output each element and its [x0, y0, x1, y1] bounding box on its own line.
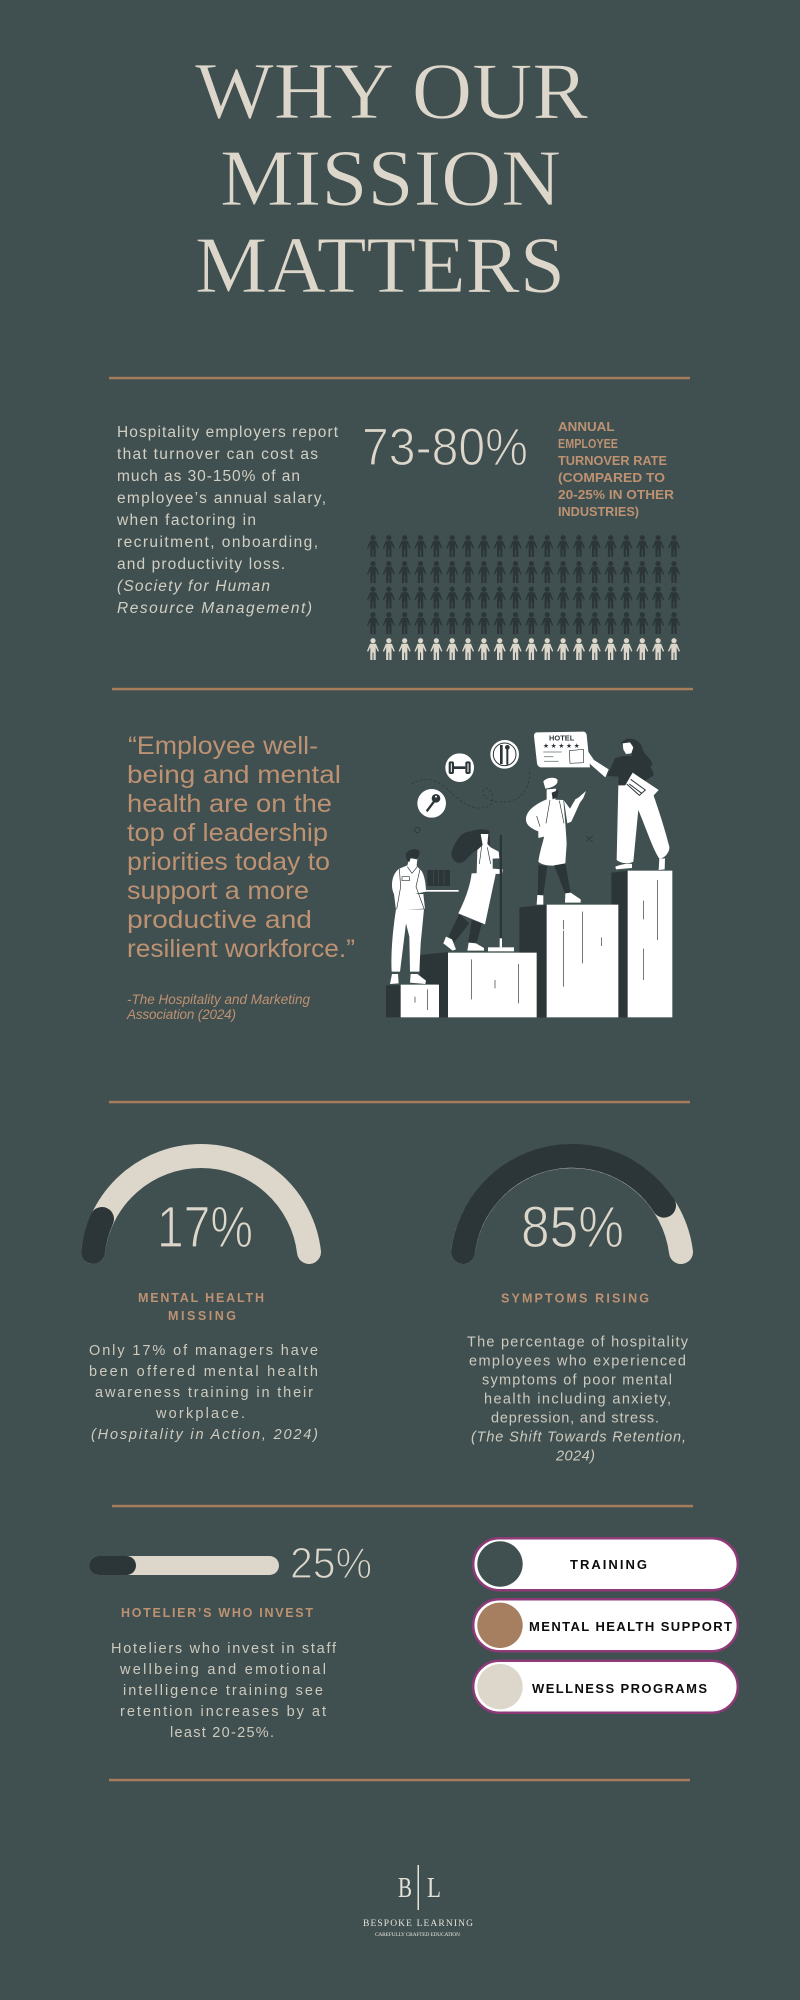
text block: turnover cost: recruitment, onboarding,	[117, 534, 318, 551]
body text: awareness training in their	[95, 1385, 313, 1401]
card: hotel rating: ★★★★★	[543, 742, 580, 750]
logo: Bespoke Learning	[363, 1865, 473, 1938]
body text: been offered mental health	[89, 1364, 318, 1380]
decorations	[415, 827, 593, 842]
legend: wellness programs	[473, 1661, 738, 1713]
heading: MENTAL HEALTH	[138, 1291, 264, 1305]
panel: symptoms rising	[463, 1156, 689, 1464]
label: annual employee turnover rate: INDUSTRIES)	[558, 505, 639, 519]
quote text: productive and	[127, 906, 312, 934]
logo: Bespoke Learning: CAREFULLY CRAFTED EDUCATION	[375, 1932, 460, 1938]
stat: 85%: 85%	[521, 1195, 624, 1260]
body text: symptoms of poor mental	[482, 1372, 672, 1388]
dashed route	[412, 769, 530, 808]
label: annual employee turnover rate	[558, 420, 674, 519]
panel: turnover	[116, 418, 680, 660]
title	[195, 46, 588, 310]
panel: quote	[126, 732, 355, 1022]
logo: Bespoke Learning: B	[398, 1872, 412, 1904]
quote citation	[126, 992, 310, 1022]
body text: employees who experienced	[469, 1354, 686, 1370]
body text: (Hospitality in Action, 2024)	[91, 1427, 318, 1443]
body text: intelligence training see	[123, 1683, 323, 1699]
stat: 25%: 25%	[290, 1539, 372, 1588]
label: annual employee turnover rate: ANNUAL	[558, 420, 615, 434]
text block: turnover cost: employee’s annual salary,	[117, 490, 326, 507]
body text: The percentage of hospitality	[467, 1334, 689, 1350]
progress bar: 25%	[89, 1556, 279, 1575]
figure: chef	[526, 778, 586, 905]
title: MISSION	[220, 133, 561, 223]
text block: turnover cost: when factoring in	[116, 512, 256, 529]
icon: key	[417, 789, 446, 818]
podium shadows	[386, 871, 628, 1017]
legend: training	[473, 1538, 738, 1590]
title: MATTERS	[195, 220, 565, 310]
legend: mental health support: MENTAL HEALTH SUPPORT	[529, 1619, 732, 1634]
text block: turnover cost: much as 30-150% of an	[117, 468, 300, 485]
quote text: resilient workforce.”	[127, 935, 355, 963]
body text: 2024)	[555, 1448, 595, 1464]
gauge: 85%	[463, 1156, 681, 1252]
icon: dumbbell	[445, 753, 474, 782]
body text	[111, 1641, 337, 1741]
quote text	[127, 732, 355, 963]
heading	[138, 1291, 264, 1323]
body text: (The Shift Towards Retention,	[471, 1430, 686, 1446]
body text	[89, 1343, 318, 1443]
text block: turnover cost: (Society for Human	[117, 578, 270, 595]
podiums	[401, 871, 672, 1017]
pictogram: people grid	[367, 535, 680, 660]
panel: mental health missing	[89, 1156, 318, 1443]
body text: retention increases by at	[120, 1704, 326, 1720]
panel: hoteliers who invest	[89, 1539, 372, 1741]
icon: cutlery	[490, 740, 519, 769]
body text: least 20-25%.	[170, 1725, 274, 1741]
legend: wellness programs: WELLNESS PROGRAMS	[532, 1681, 707, 1696]
quote citation: Association (2024)	[126, 1007, 236, 1022]
heading: SYMPTOMS RISING	[501, 1292, 649, 1306]
label: annual employee turnover rate: (COMPARED TO	[558, 471, 665, 485]
heading: MISSING	[168, 1309, 236, 1323]
text block: turnover cost: Resource Management)	[117, 600, 312, 617]
label: annual employee turnover rate: EMPLOYEE	[558, 437, 618, 451]
body text: health including anxiety,	[484, 1392, 671, 1408]
legend: training: TRAINING	[570, 1557, 647, 1572]
quote text: priorities today to	[127, 848, 330, 876]
podium marks	[415, 880, 658, 1010]
text block: turnover cost: Hospitality employers report	[117, 424, 339, 441]
figure: waiter	[390, 849, 459, 984]
figure: businesswoman	[583, 739, 669, 870]
title: WHY OUR	[195, 46, 588, 136]
quote text: top of leadership	[127, 819, 328, 847]
stat: 17%: 17%	[157, 1195, 253, 1260]
card: hotel rating: HOTEL	[549, 734, 575, 743]
gauge: 17%	[93, 1156, 309, 1252]
body text: depression, and stress.	[491, 1410, 659, 1426]
body text: Hoteliers who invest in staff	[111, 1641, 337, 1657]
label: annual employee turnover rate: 20-25% IN OTHER	[558, 488, 674, 502]
figure: woman with mop	[443, 829, 514, 951]
quote citation: -The Hospitality and Marketing	[127, 992, 310, 1007]
body text: Only 17% of managers have	[89, 1343, 318, 1359]
body text: workplace.	[155, 1406, 245, 1422]
quote text: support a more	[127, 877, 309, 905]
text block: turnover cost: and productivity loss.	[117, 556, 285, 573]
card: hotel rating	[534, 732, 590, 767]
quote text: being and mental	[127, 761, 341, 789]
label: annual employee turnover rate: TURNOVER RATE	[558, 454, 667, 468]
text block: turnover cost: that turnover can cost as	[117, 446, 318, 463]
heading: HOTELIER’S WHO INVEST	[121, 1606, 313, 1620]
logo: Bespoke Learning: L	[427, 1872, 441, 1904]
text block: turnover cost	[116, 424, 339, 617]
stat: 73-80%: 73-80%	[362, 418, 528, 477]
quote text: “Employee well-	[128, 732, 318, 760]
logo: Bespoke Learning: BESPOKE LEARNING	[363, 1919, 473, 1929]
illustration: hospitality staff on podiums	[386, 732, 672, 1017]
quote text: health are on the	[127, 790, 332, 818]
body text	[467, 1334, 689, 1464]
body text: wellbeing and emotional	[119, 1662, 326, 1678]
legend: mental health support	[473, 1599, 738, 1651]
